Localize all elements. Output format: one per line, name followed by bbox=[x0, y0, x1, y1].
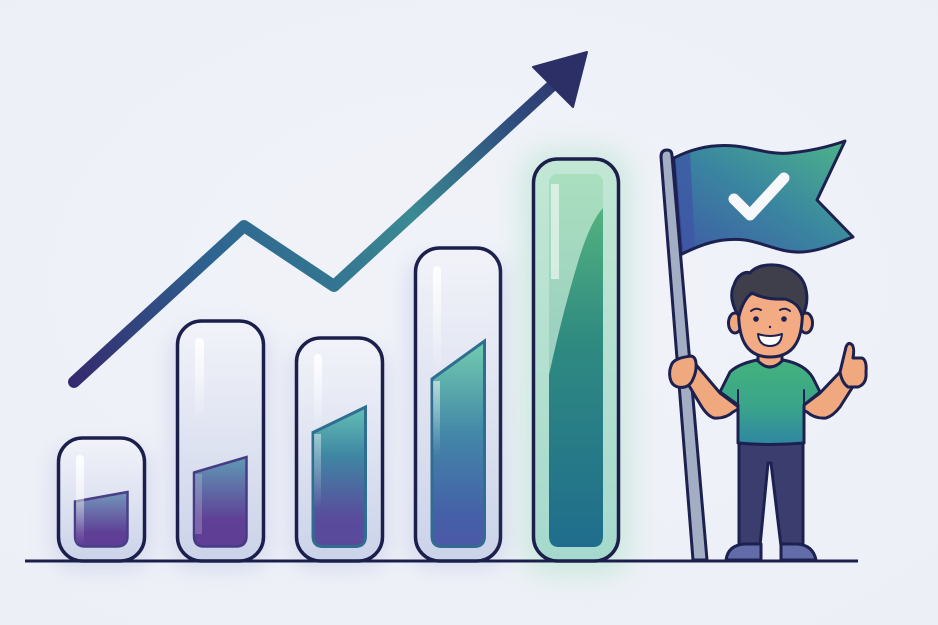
ground line bbox=[25, 560, 858, 562]
left arm bbox=[688, 360, 740, 418]
neck bbox=[758, 352, 782, 367]
left sleeve seam bbox=[737, 390, 739, 405]
left eye bbox=[753, 316, 759, 322]
icon: check mark bbox=[734, 178, 784, 215]
left ear bbox=[728, 313, 742, 333]
face bbox=[739, 292, 802, 357]
right arm bbox=[800, 372, 852, 418]
flag pole bbox=[661, 150, 707, 560]
thumbs-up hand bbox=[840, 343, 866, 387]
left eyebrow bbox=[751, 309, 761, 311]
smile bbox=[758, 334, 782, 346]
right shoe bbox=[781, 544, 816, 560]
trousers bbox=[739, 443, 803, 546]
person giving thumbs up bbox=[670, 265, 866, 560]
right eye bbox=[781, 316, 787, 322]
nose bbox=[769, 326, 771, 328]
right eyebrow bbox=[780, 309, 790, 311]
bar 2 bbox=[170, 321, 270, 570]
bar 3 bbox=[289, 338, 389, 569]
bar 4 bbox=[407, 248, 507, 568]
bar 5: highlighted green bbox=[522, 150, 630, 575]
growth arrow bbox=[74, 52, 587, 382]
left hand gripping pole bbox=[670, 356, 696, 387]
flag cloth bbox=[674, 141, 853, 254]
right sleeve seam bbox=[803, 390, 805, 405]
bar chart bbox=[52, 150, 630, 575]
t-shirt bbox=[720, 360, 820, 444]
hair bbox=[732, 265, 807, 316]
left shoe bbox=[726, 544, 761, 560]
flag with pole bbox=[661, 141, 853, 560]
bar 1 bbox=[52, 438, 152, 570]
right ear bbox=[800, 313, 812, 333]
